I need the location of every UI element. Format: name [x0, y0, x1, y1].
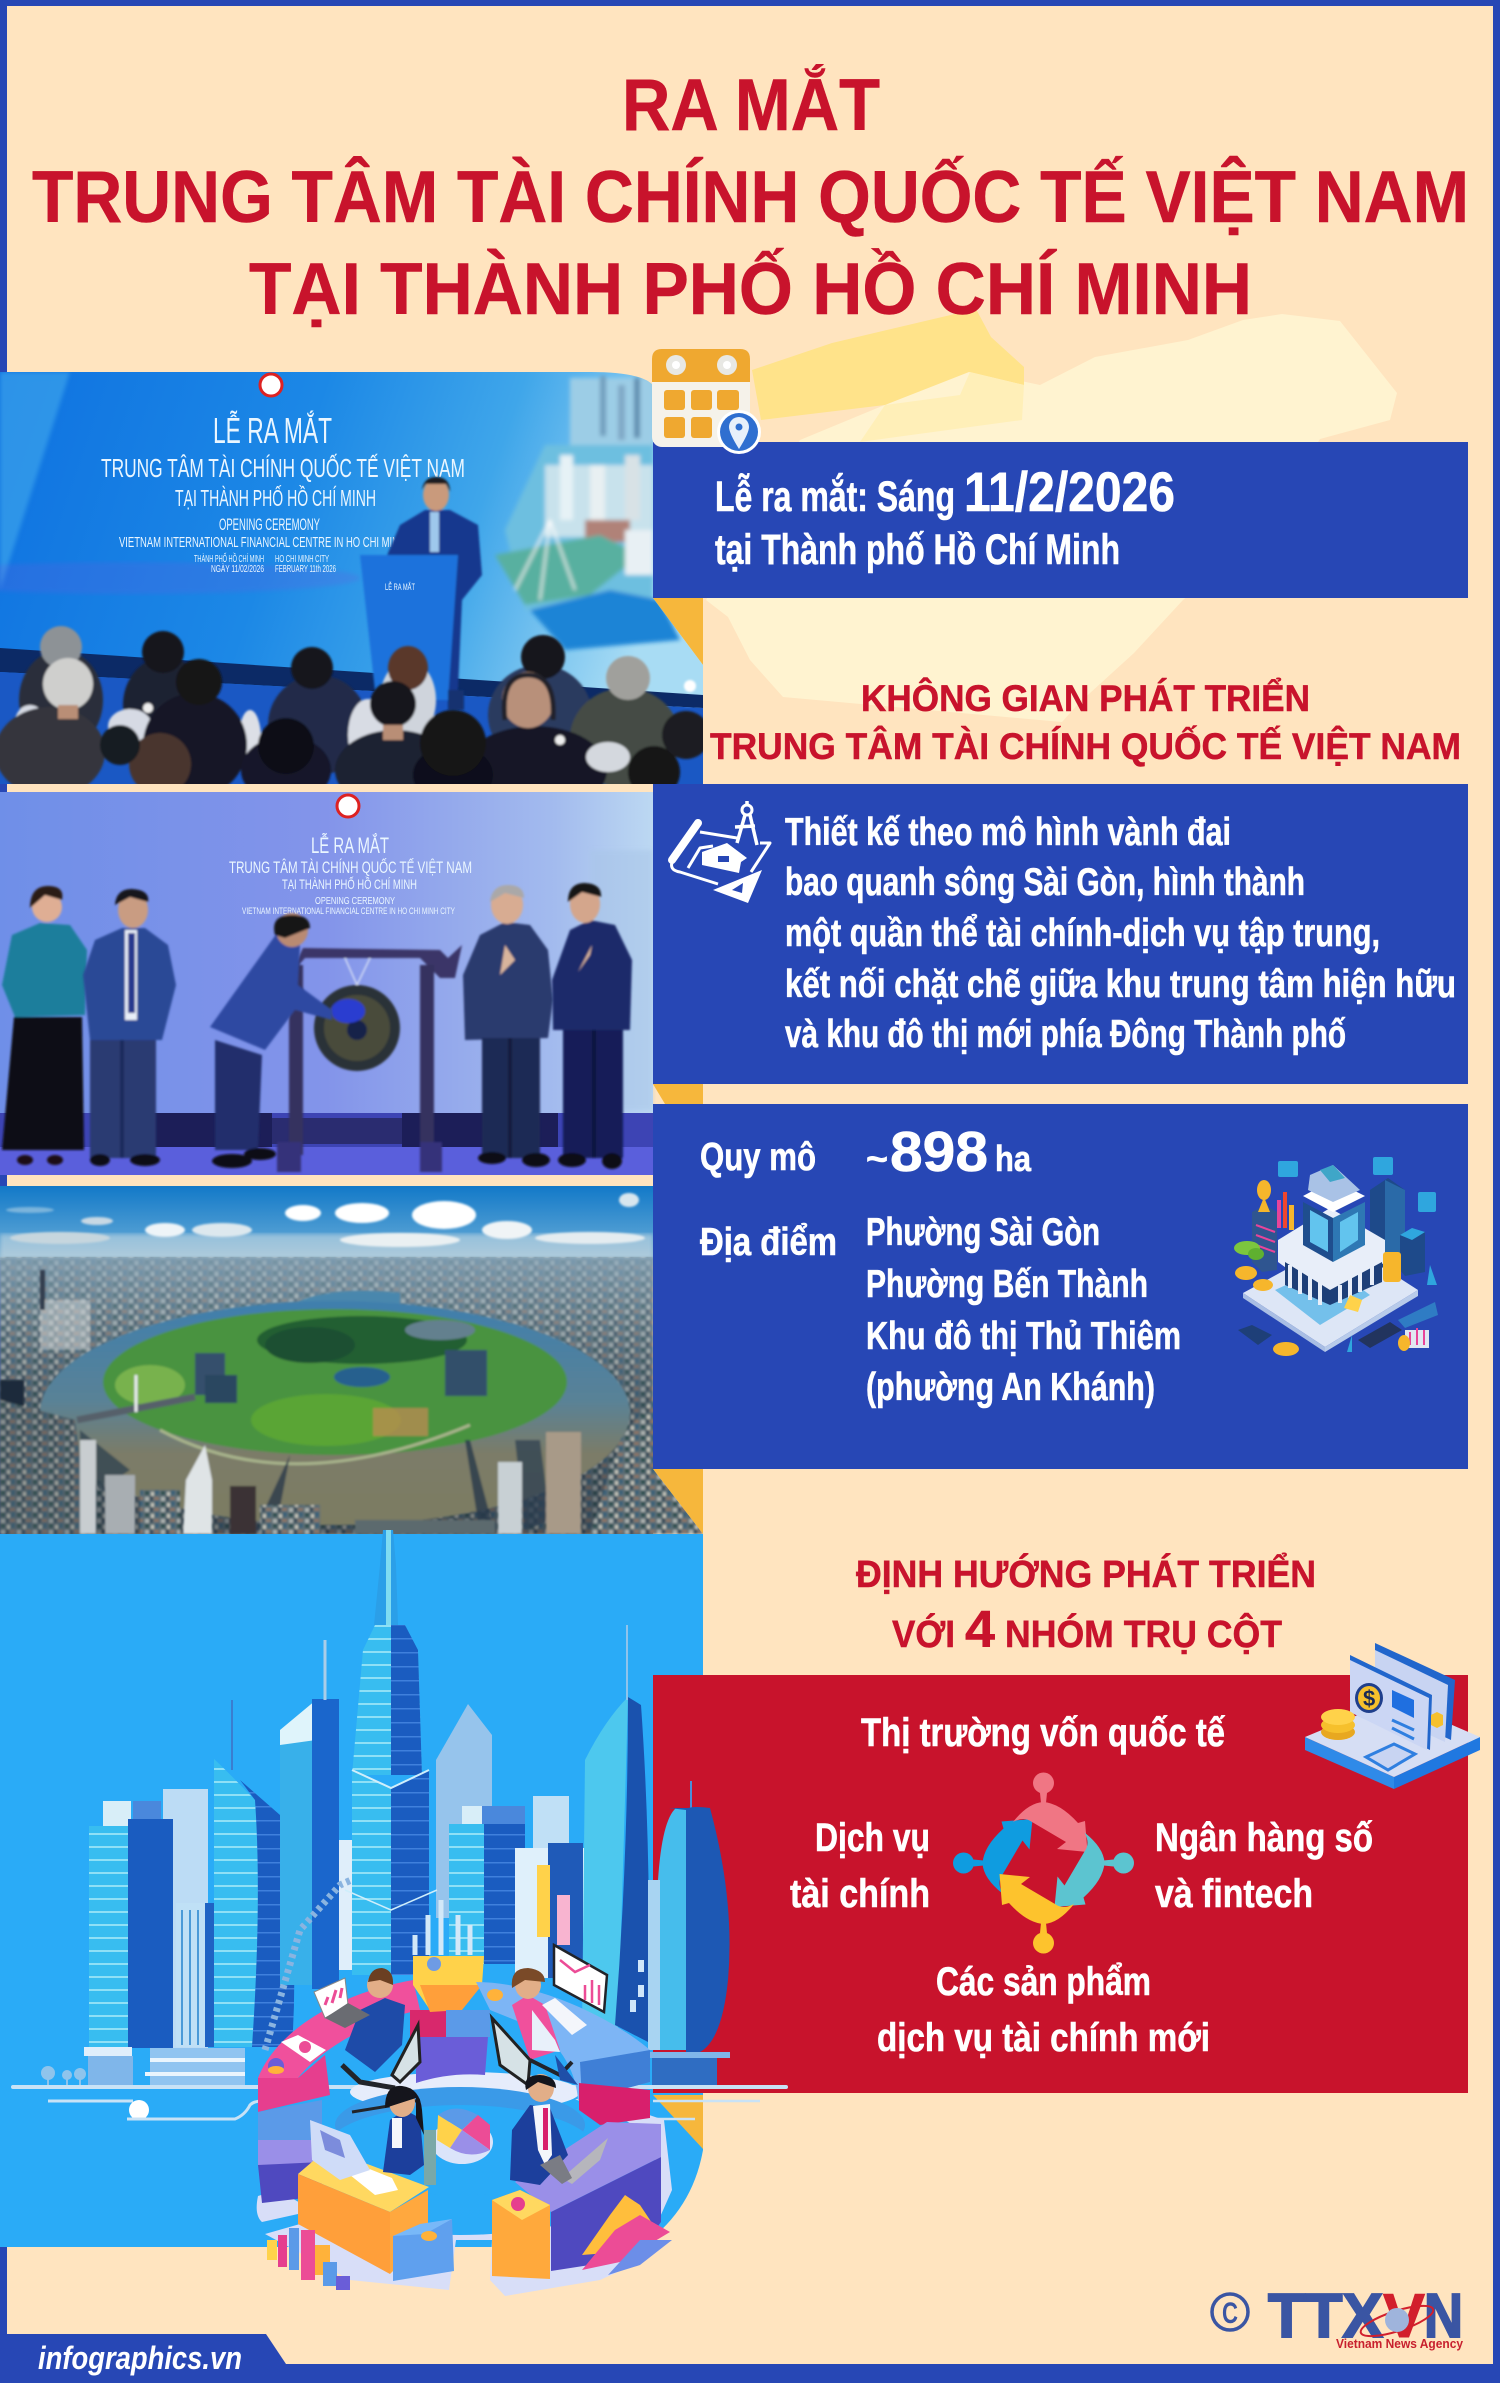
copyright logo: TTX — [1268, 2282, 1383, 2351]
stage edge — [0, 648, 703, 708]
panel: scale and location: Địa điểm — [700, 1221, 837, 1264]
upper left worker — [281, 1968, 420, 2112]
bar chart blocks — [267, 2228, 350, 2290]
date box: Lễ ra mắt: Sáng — [715, 472, 955, 521]
date box: 11/2/2026 — [964, 460, 1175, 523]
pillar labels: và fintech — [1155, 1872, 1313, 1916]
left tower — [89, 1801, 214, 2048]
screen text: NGÀY 11/02/2026 — [211, 562, 264, 575]
panel: scale and location: ~ — [866, 1138, 888, 1179]
podium caption: LỄ RA MẮT — [385, 581, 415, 592]
website label: infographics.vn — [38, 2340, 242, 2376]
speaker — [360, 477, 482, 710]
icon: digital bank cards — [1305, 1643, 1480, 1789]
lower left worker — [310, 2086, 436, 2185]
screen text: TẠI THÀNH PHỐ HỒ CHÍ MINH — [282, 875, 417, 892]
panel: design description: và khu đô thị mới phía Đông Thành phố — [785, 1013, 1346, 1056]
arrow: teal — [1054, 1832, 1134, 1907]
date box: tại Thành phố Hồ Chí Minh — [715, 526, 1120, 574]
lower left desk — [258, 2100, 322, 2140]
panel: city illustration background — [0, 1534, 703, 2247]
pie chart — [431, 2108, 493, 2164]
front yellow desk — [298, 2149, 454, 2281]
desk base lavender edge — [257, 2095, 672, 2296]
pink arc — [258, 1980, 420, 2078]
front right purple desk — [492, 2122, 661, 2279]
accent triangle under scale box — [653, 1469, 703, 1534]
panel: scale and location: 898 — [890, 1120, 988, 1184]
decorative brush: pale yellow — [860, 372, 1024, 442]
panel: scale and location: (phường An Khánh) — [866, 1366, 1155, 1409]
curved tower — [214, 1700, 294, 2047]
screen text: OPENING CEREMONY — [315, 896, 395, 907]
panel: scale and location: Quy mô — [700, 1136, 816, 1179]
right tall tower — [582, 1625, 649, 2042]
pillar labels — [790, 1711, 1373, 2060]
panel: scale and location: Khu đô thị Thủ Thiêm — [866, 1315, 1181, 1358]
photo: gong striking ceremony — [0, 792, 653, 1175]
far buildings — [163, 1789, 208, 2049]
far right tower — [648, 1781, 730, 2052]
decorative brush: yellow — [752, 309, 1024, 420]
decorative brush: cream — [706, 314, 1397, 722]
gong and frame — [277, 945, 462, 1172]
title — [32, 65, 1469, 330]
screen text: HO CHI MINH CITY — [275, 554, 329, 565]
ground structures — [84, 2047, 132, 2056]
panel: scale and location: Phường Bến Thành — [866, 1263, 1148, 1306]
centre blocks — [446, 2010, 490, 2037]
heading: development space — [710, 677, 1461, 767]
arrow: pink — [1013, 1772, 1088, 1852]
lower right worker — [510, 2074, 608, 2185]
screen text — [229, 795, 472, 916]
upper right worker — [492, 1945, 607, 2085]
icon: blueprint with compass — [672, 801, 770, 903]
guests — [2, 886, 87, 1165]
icon: digital bank cards: $ — [1363, 1686, 1375, 1711]
screen text — [101, 374, 465, 575]
title: TẠI THÀNH PHỐ HỒ CHÍ MINH — [249, 248, 1252, 330]
heading: development space: KHÔNG GIAN PHÁT TRIỂN — [861, 677, 1310, 719]
panel: design description: bao quanh sông Sài Gòn, hình thành — [785, 861, 1305, 904]
pillar labels: tài chính — [790, 1872, 930, 1916]
title: RA MẮT — [622, 65, 880, 146]
screen text: TẠI THÀNH PHỐ HỒ CHÍ MINH — [175, 484, 376, 511]
area chart — [582, 2195, 672, 2275]
right mid block — [415, 1806, 624, 1978]
screen text: TRUNG TÂM TÀI CHÍNH QUỐC TẾ VIỆT NAM — [229, 857, 472, 877]
panel: design description: Thiết kế theo mô hình vành đai — [785, 811, 1231, 854]
copyright logo: N — [1424, 2282, 1463, 2351]
heading: development orientation: NHÓM TRỤ CỘT — [1005, 1611, 1282, 1656]
screen text: LỄ RA MẮT — [213, 409, 332, 451]
heading: development orientation: 4 — [965, 1601, 995, 1659]
copyright logo — [1212, 2282, 1464, 2351]
screen text: LỄ RA MẮT — [311, 832, 389, 858]
arrow: yellow — [1000, 1874, 1074, 1954]
stage — [0, 1113, 653, 1147]
heading: development orientation: VỚI — [892, 1612, 955, 1656]
accent triangle under red box — [653, 2095, 703, 2149]
photo: opening ceremony speech — [0, 372, 710, 814]
pillar labels: dịch vụ tài chính mới — [877, 2016, 1210, 2060]
screen text: VIETNAM INTERNATIONAL FINANCIAL CENTRE IN HO CHI MINH CITY — [242, 906, 455, 916]
central tower — [345, 1530, 437, 1975]
pillar labels: Các sản phẩm — [936, 1960, 1151, 2004]
pillar labels: Ngân hàng số — [1155, 1816, 1373, 1860]
red pillars box — [653, 1675, 1468, 2093]
copyright logo: V — [1383, 2282, 1425, 2351]
panel: scale and location: ha — [995, 1138, 1032, 1179]
accent triangle under date box — [653, 598, 703, 665]
centre yellow block — [413, 1956, 484, 2010]
screen city rendering — [495, 376, 680, 650]
skyline illustration — [11, 1530, 788, 2120]
screen text: VIETNAM INTERNATIONAL FINANCIAL CENTRE IN HO CHI MIN — [119, 534, 399, 551]
desk ring illustration with workers — [257, 1945, 672, 2296]
accent strip between boxes — [653, 1084, 703, 1104]
icon: calendar with location pin — [652, 349, 761, 454]
panel: scale and location — [653, 1104, 1468, 1469]
icon: four-arrow cycle — [953, 1772, 1134, 1954]
heading: development space: TRUNG TÂM TÀI CHÍNH QUỐC TẾ VIỆT NAM — [710, 725, 1461, 767]
copyright logo: Vietnam News Agency — [1336, 2336, 1464, 2351]
panel: design description — [653, 784, 1468, 1084]
icon: isometric finance building — [1234, 1157, 1438, 1356]
screen text: THÀNH PHỐ HỒ CHÍ MINH — [194, 551, 264, 565]
pillar labels: Dịch vụ — [815, 1816, 930, 1860]
heading: development orientation — [856, 1551, 1316, 1659]
screen text: FEBRUARY 11th 2026 — [275, 564, 336, 575]
screen text: TRUNG TÂM TÀI CHÍNH QUỐC TẾ VIỆT NAM — [101, 453, 465, 483]
pillar labels: Thị trường vốn quốc tế — [861, 1711, 1226, 1755]
copyright logo: C — [1222, 2297, 1238, 2330]
arrow: blue — [953, 1819, 1032, 1894]
panel: scale and location: Phường Sài Gòn — [866, 1211, 1100, 1254]
footer tab — [0, 2334, 286, 2383]
mid tower — [265, 1640, 385, 2050]
photo: Thu Thiem aerial view — [0, 1186, 703, 1534]
screen text: OPENING CEREMONY — [219, 515, 320, 534]
heading: development orientation: ĐỊNH HƯỚNG PHÁT TRIỂN — [856, 1551, 1316, 1596]
right arc — [476, 1982, 650, 2100]
audience — [0, 624, 703, 784]
date box — [653, 442, 1468, 598]
